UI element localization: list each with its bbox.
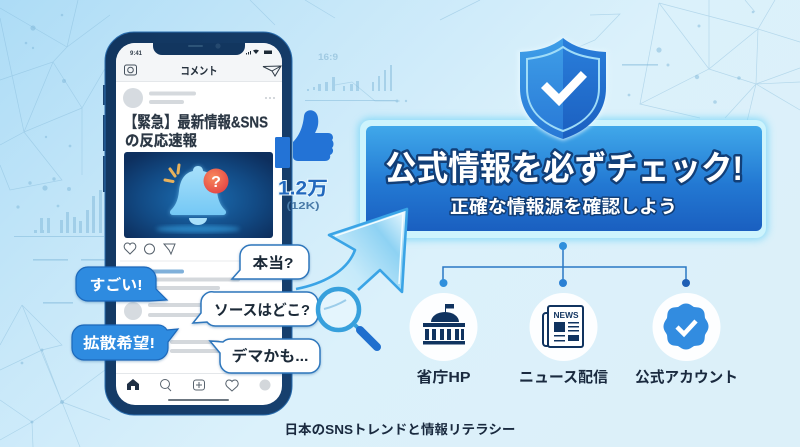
post headline: の反応速報 [125,132,197,150]
panel fill [366,126,762,231]
post image: bell [124,152,273,238]
icon: government building [410,293,478,361]
label: ニュース配信 [519,369,608,386]
send icon [263,66,281,76]
camera icon [124,65,136,75]
bubble: ソースはどこ? [193,292,318,326]
main callout panel [358,118,768,240]
source: news feeds [519,293,608,386]
icon: newspaper: NEWS [554,311,579,320]
bubble: ソースはどこ?: ソースはどこ? [214,302,310,319]
phone side buttons [103,85,106,192]
icon: shield with check [518,37,608,140]
bubble: 拡散希望!: 拡散希望! [83,334,155,352]
like count in English: (12K) [286,200,320,212]
phone screen [116,43,282,405]
notch [153,43,245,55]
bubble: すごい!: すごい! [90,276,142,294]
background ratio label: 16:9 [318,52,338,62]
post author placeholder [123,88,275,108]
source: ministry website [410,293,478,386]
post headline [124,112,268,150]
thumbs-up icon with count [275,110,334,212]
phone [103,32,292,415]
speaker and camera [188,43,221,49]
panel subheading: 正確な情報源を確認しよう [450,197,677,217]
post actions [124,243,175,254]
bubble: 本当?: 本当? [252,254,294,272]
status icons [246,50,272,54]
bottom navigation [127,379,270,391]
connector tree [440,242,690,287]
bubble: デマかも...: デマかも... [232,347,308,365]
bubble: デマかも... [210,339,320,373]
arrow pointing to panel [296,209,407,292]
like count: 1.2万 [278,178,328,200]
bubble: すごい! [76,267,167,301]
home indicator [168,399,229,401]
source: official accounts [635,293,738,386]
icon: verified badge [652,293,720,361]
app header bar [116,43,282,81]
post headline: 【緊急】最新情報&SNS [124,112,268,132]
icon: magnifying glass [318,289,377,347]
comment placeholders [124,270,240,353]
phone body [105,32,292,415]
thumbs-up icon [275,110,334,168]
panel frame [360,120,766,238]
post image: bell: ? [211,174,221,191]
bubble: 拡散希望! [72,325,178,360]
panel glow [358,118,768,240]
panel headline: 公式情報を必ずチェック! [385,150,743,188]
footer caption: 日本のSNSトレンドと情報リテラシー [284,422,516,437]
status time: 9:41 [130,51,143,57]
label: 公式アカウント [635,369,738,386]
app header title: コメント [180,66,218,78]
label: 省庁HP [416,368,470,386]
bubble: 本当? [232,245,309,279]
